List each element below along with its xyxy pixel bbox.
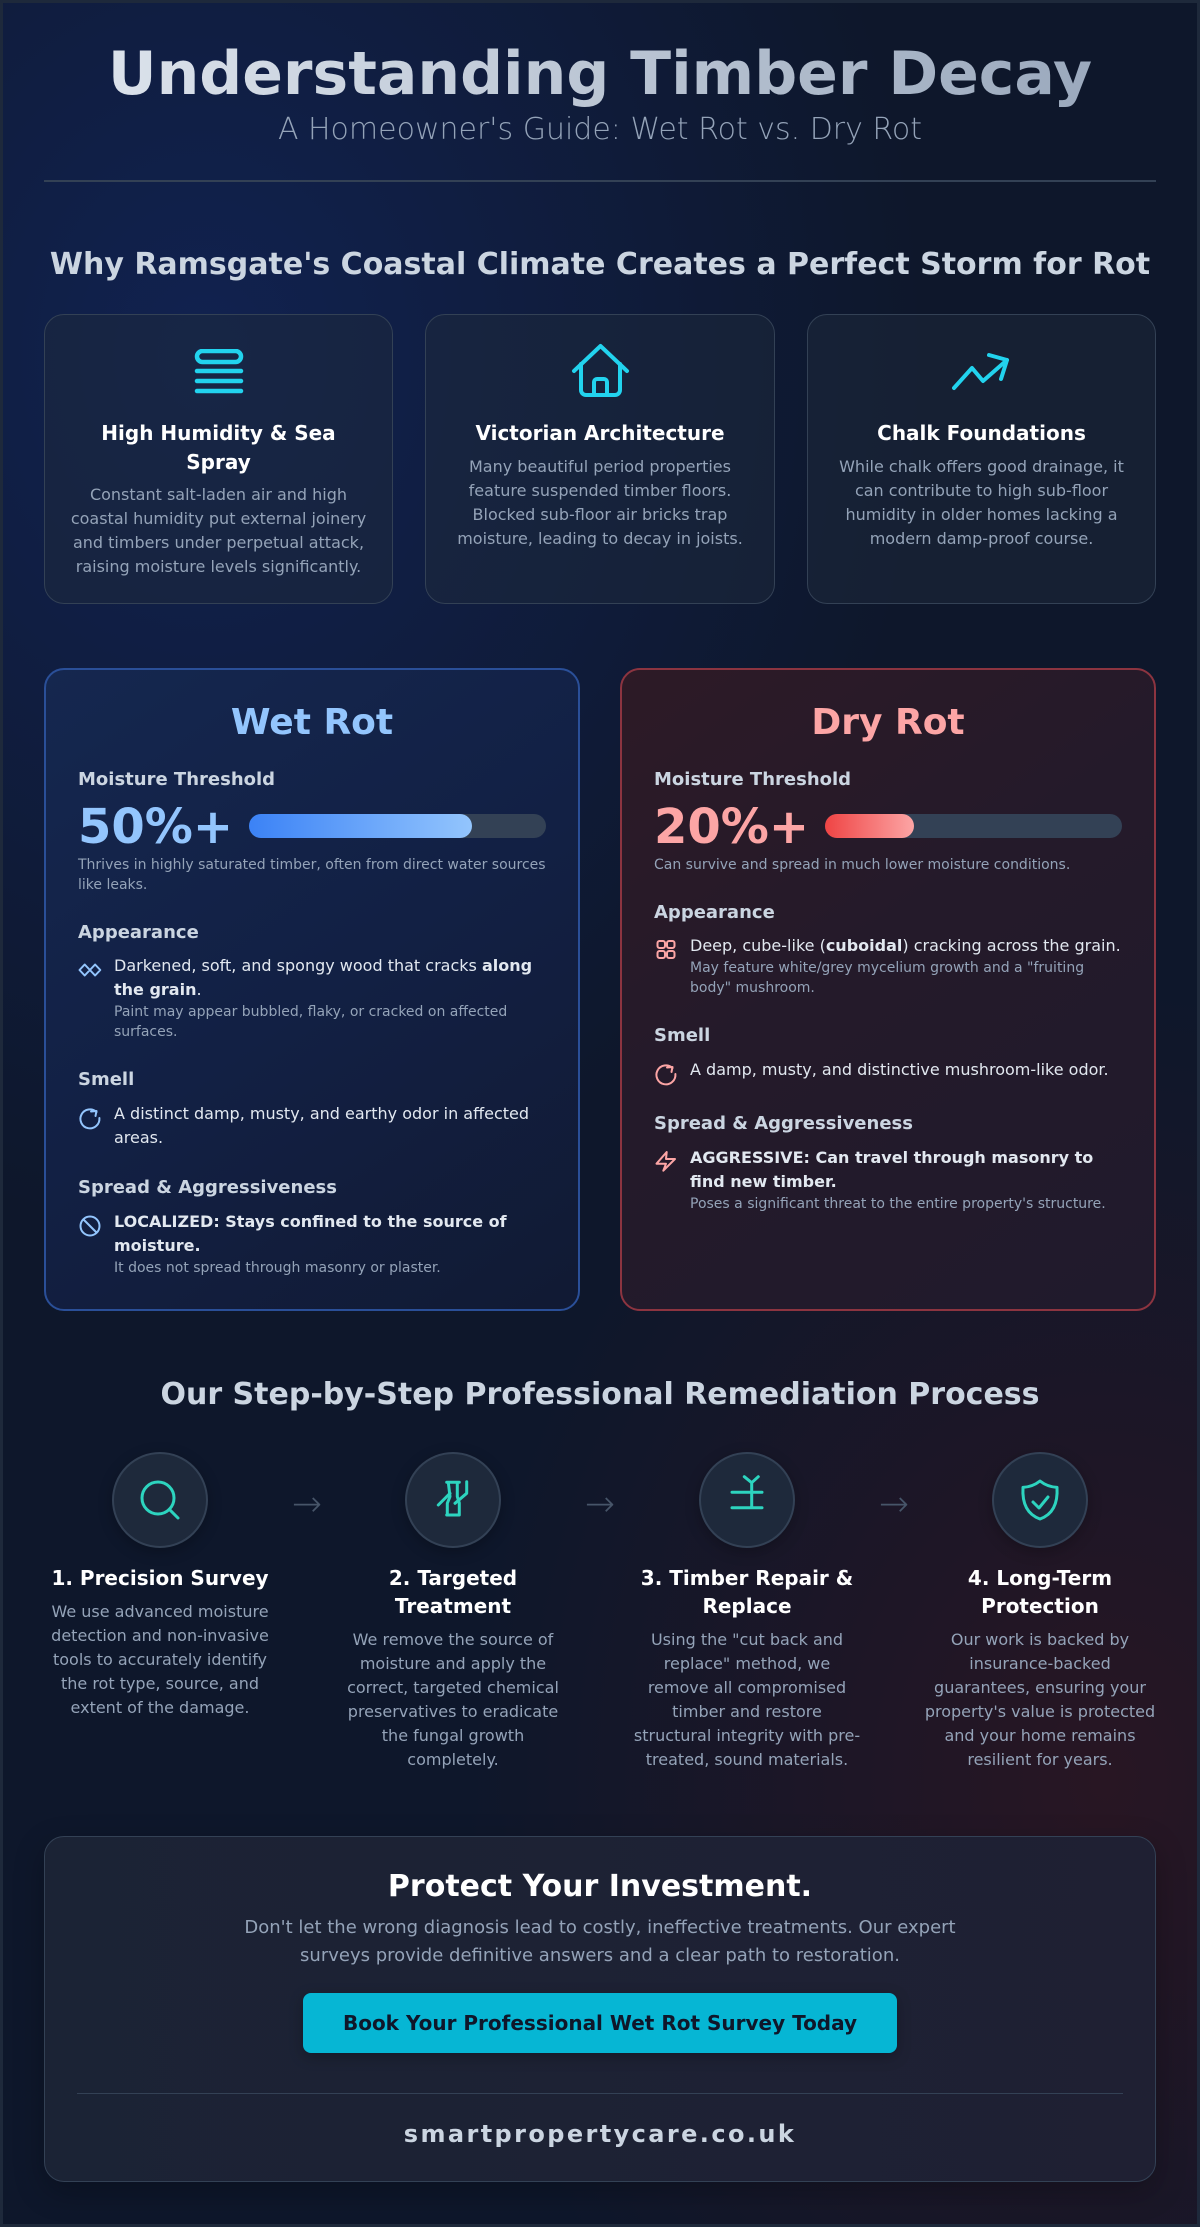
step text: and your home remains (944, 1726, 1136, 1745)
smell text (114, 1104, 529, 1147)
panel: call to action (44, 1836, 1156, 2182)
step text: detection and non-invasive (51, 1626, 269, 1645)
appearance text: Paint may appear bubbled, flaky, or cracked on affected (114, 1004, 507, 1020)
moisture note: like leaks. (78, 877, 147, 893)
subtitle: A Homeowner's Guide: Wet Rot vs. Dry Rot (278, 112, 922, 147)
appearance text: Deep, cube-like (cuboidal) cracking across the grain. (690, 936, 1121, 955)
spread text (690, 1148, 1106, 1212)
step text: tools to accurately identify (53, 1650, 267, 1669)
cta text: surveys provide definitive answers and a clear path to restoration. (300, 1945, 900, 1966)
step title: Replace (702, 1594, 792, 1618)
card text: Many beautiful period properties (469, 457, 731, 476)
cta button: Book Your Professional Wet Rot Survey Today (343, 2011, 857, 2035)
step title: 1. Precision Survey (51, 1566, 269, 1590)
step 4 (925, 1452, 1155, 1769)
panel: architecture card (425, 314, 775, 604)
card text: raising moisture levels significantly. (76, 557, 361, 576)
smell label: Smell (654, 1025, 710, 1046)
icon: cubes (656, 940, 676, 959)
panel: chalk card (807, 314, 1156, 604)
step title: 3. Timber Repair & (641, 1566, 853, 1590)
icon: grain (78, 964, 102, 976)
smell text: A distinct damp, musty, and earthy odor in affected (114, 1104, 529, 1123)
step text: preservatives to eradicate (348, 1702, 558, 1721)
step text: We remove the source of (353, 1630, 553, 1649)
card text: feature suspended timber floors. (469, 481, 731, 500)
step text (51, 1602, 269, 1717)
step title: 4. Long-Term (968, 1566, 1112, 1590)
step text (925, 1630, 1155, 1769)
icon: odor (79, 1108, 100, 1130)
step text: insurance-backed (969, 1654, 1111, 1673)
spread text: It does not spread through masonry or plaster. (114, 1260, 441, 1276)
icon: lightning (656, 1151, 676, 1172)
spread text: moisture. (114, 1236, 201, 1255)
card text: can contribute to high sub-floor (855, 481, 1108, 500)
cta button (303, 1993, 897, 2053)
step text: completely. (407, 1750, 499, 1769)
card heading: Chalk Foundations (877, 421, 1086, 445)
wet rot heading: Wet Rot (231, 702, 393, 743)
card text (839, 457, 1124, 548)
website: smartpropertycare.co.uk (404, 2120, 796, 2148)
cta text: Don't let the wrong diagnosis lead to costly, ineffective treatments. Our expert (244, 1917, 956, 1938)
card heading: Victorian Architecture (475, 421, 725, 445)
panel: wet rot (44, 668, 580, 1311)
moisture value: 50%+ (78, 799, 233, 855)
spread text: Poses a significant threat to the entire property's structure. (690, 1196, 1106, 1212)
smell text: areas. (114, 1128, 163, 1147)
cta text (244, 1917, 956, 1966)
appearance text: the grain. (114, 980, 202, 999)
icon: search (112, 1452, 208, 1548)
card text (457, 457, 743, 548)
step text: moisture and apply the (360, 1654, 546, 1673)
appearance text: Darkened, soft, and spongy wood that cracks along (114, 956, 532, 975)
panel: dry rot (620, 668, 1156, 1311)
step text (634, 1630, 860, 1769)
card heading (101, 421, 336, 474)
heading: coastal climate: Why Ramsgate's Coastal Climate Creates a Perfect Storm for Rot (50, 247, 1150, 282)
card text: modern damp-proof course. (870, 529, 1093, 548)
icon: layers (194, 349, 244, 394)
arrow 2: → (585, 1484, 615, 1525)
card text: moisture, leading to decay in joists. (457, 529, 743, 548)
moisture note: Can survive and spread in much lower moisture conditions. (654, 857, 1070, 873)
step text: timber and restore (672, 1702, 822, 1721)
icon: house (572, 344, 630, 397)
step text: resilient for years. (967, 1750, 1113, 1769)
step text: guarantees, ensuring your (934, 1678, 1146, 1697)
card text (71, 485, 366, 576)
icon: trend arrow (952, 353, 1010, 390)
spread text: AGGRESSIVE: Can travel through masonry to (690, 1148, 1093, 1167)
moisture label: Moisture Threshold (78, 769, 275, 790)
moisture note (78, 857, 546, 893)
step text: correct, targeted chemical (347, 1678, 559, 1697)
step 3 (634, 1452, 860, 1769)
arrow 3: → (879, 1484, 909, 1525)
cta heading: Protect Your Investment. (388, 1869, 812, 1904)
arrow 1: → (292, 1484, 322, 1525)
step text: property's value is protected (925, 1702, 1155, 1721)
step text: structural integrity with pre- (634, 1726, 860, 1745)
moisture bar (825, 814, 1122, 838)
spread label: Spread & Aggressiveness (78, 1177, 337, 1198)
icon: treatment (405, 1452, 501, 1548)
step title (389, 1566, 517, 1618)
step text: the fungal growth (382, 1726, 524, 1745)
step title: 2. Targeted (389, 1566, 517, 1590)
card text: and timbers under perpetual attack, (73, 533, 364, 552)
card heading: High Humidity & Sea (101, 421, 336, 445)
icon: confined (80, 1216, 100, 1236)
appearance text: body" mushroom. (690, 980, 815, 996)
step text: replace" method, we (664, 1654, 830, 1673)
appearance text (114, 956, 532, 1040)
appearance text: surfaces. (114, 1024, 178, 1040)
icon: odor (655, 1064, 676, 1086)
spread text: LOCALIZED: Stays confined to the source of (114, 1212, 507, 1231)
card text: While chalk offers good drainage, it (839, 457, 1124, 476)
appearance text (690, 936, 1121, 996)
title: Understanding Timber Decay (108, 39, 1092, 109)
heading: process: Our Step-by-Step Professional Remediation Process (160, 1377, 1040, 1412)
appearance label: Appearance (78, 922, 199, 943)
smell text: A damp, musty, and distinctive mushroom-like odor. (690, 1060, 1109, 1079)
smell label: Smell (78, 1069, 134, 1090)
card text: coastal humidity put external joinery (71, 509, 366, 528)
step text: the rot type, source, and (61, 1674, 259, 1693)
dry rot heading: Dry Rot (811, 702, 965, 743)
step 2 (347, 1452, 559, 1769)
panel: humidity card (44, 314, 393, 604)
card heading: Spray (186, 450, 251, 474)
step text: remove all compromised (648, 1678, 846, 1697)
card text: Constant salt-laden air and high (90, 485, 347, 504)
icon: timber repair (699, 1452, 795, 1548)
step text: We use advanced moisture (51, 1602, 269, 1621)
step 1 (51, 1452, 269, 1717)
icon: shield (992, 1452, 1088, 1548)
step title (641, 1566, 853, 1618)
moisture label: Moisture Threshold (654, 769, 851, 790)
step title (968, 1566, 1112, 1618)
card text: humidity in older homes lacking a (845, 505, 1118, 524)
step title: Treatment (395, 1594, 511, 1618)
appearance label: Appearance (654, 902, 775, 923)
spread text (114, 1212, 507, 1276)
card text: Blocked sub-floor air bricks trap (473, 505, 727, 524)
moisture bar (249, 814, 546, 838)
step text: treated, sound materials. (646, 1750, 848, 1769)
spread label: Spread & Aggressiveness (654, 1113, 913, 1134)
moisture value: 20%+ (654, 799, 809, 855)
step text: extent of the damage. (71, 1698, 249, 1717)
step text: Using the "cut back and (651, 1630, 843, 1649)
step text: Our work is backed by (951, 1630, 1129, 1649)
spread text: find new timber. (690, 1172, 837, 1191)
appearance text: May feature white/grey mycelium growth and a "fruiting (690, 960, 1084, 976)
step title: Protection (981, 1594, 1099, 1618)
step text (347, 1630, 559, 1769)
moisture note: Thrives in highly saturated timber, often from direct water sources (78, 857, 546, 873)
